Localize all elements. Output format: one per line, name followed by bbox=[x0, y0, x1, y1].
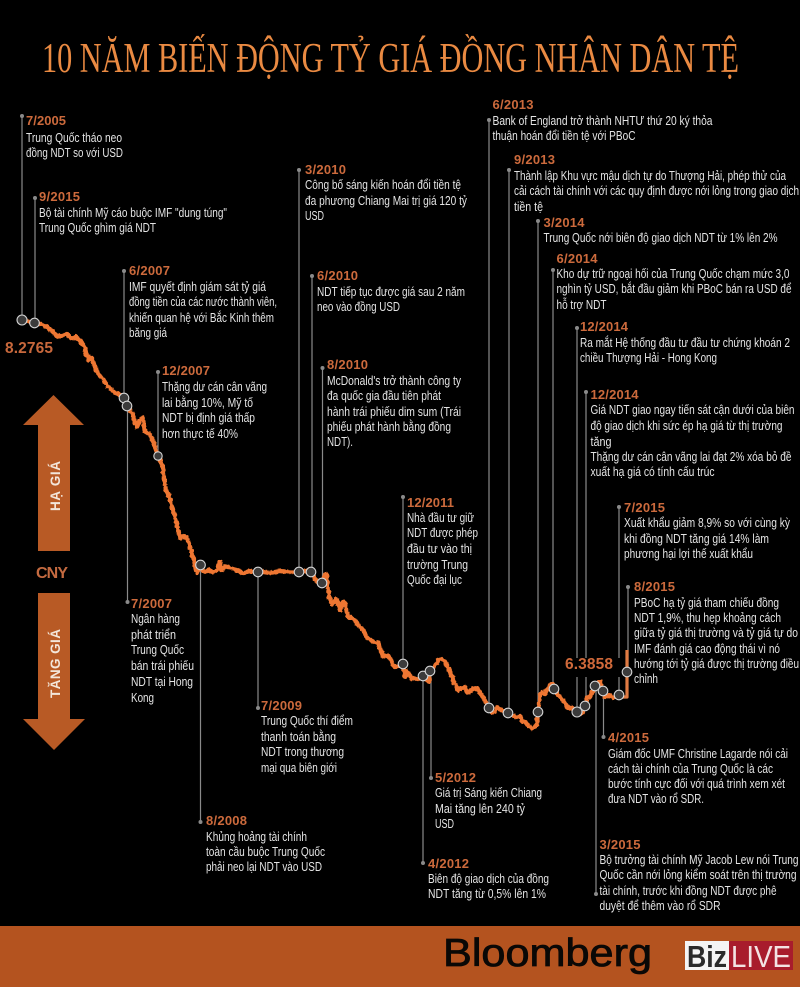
footer bar bbox=[0, 926, 800, 987]
annotation 7/2007: Ngân hàng bbox=[131, 612, 180, 626]
annotation 8/2015 bbox=[634, 579, 799, 686]
annotation 8/2010 bbox=[327, 357, 462, 449]
annotation 12/2011: Nhà đầu tư giữ bbox=[407, 511, 474, 525]
annotation 7/2015: phương hại lợi thế xuất khẩu bbox=[624, 547, 753, 561]
annotation 7/2015 bbox=[624, 500, 791, 561]
annotation 12/2011: trường Trung bbox=[407, 558, 468, 572]
annotation 7/2007: Trung Quốc bbox=[131, 643, 184, 657]
annotation 8/2008: Khủng hoảng tài chính bbox=[206, 830, 307, 844]
annotation 5/2012: Mai tăng lên 240 tỷ bbox=[435, 802, 526, 816]
annotation 8/2008: phải neo lại NDT vào USD bbox=[206, 860, 322, 874]
annotation 8/2010: hành trái phiếu dim sum (Trái bbox=[327, 405, 461, 419]
annotation 6/2007: đồng tiền của các nước thành viên, bbox=[129, 295, 277, 309]
annotation 8/2015: 8/2015 bbox=[634, 579, 675, 594]
annotation 4/2015: 4/2015 bbox=[608, 730, 649, 745]
annotation 7/2007: 7/2007 bbox=[131, 596, 172, 611]
annotation 8/2008: toàn cầu buộc Trung Quốc bbox=[206, 845, 325, 859]
annotation 6/2014: hỗ trợ NDT bbox=[556, 297, 607, 312]
annotation 12/2014 stock connect: chiều Thượng Hải - Hong Kong bbox=[580, 351, 717, 365]
annotation 12/2011: NDT được phép bbox=[407, 526, 478, 540]
annotation 5/2012: USD bbox=[435, 817, 454, 831]
annotation 7/2007: phát triển bbox=[131, 628, 176, 642]
annotation 9/2015: 9/2015 bbox=[39, 189, 80, 204]
annotation 6/2013 bbox=[492, 97, 713, 143]
arrow: depreciation (up): HẠ GIÁ bbox=[48, 461, 63, 511]
annotation 8/2010: đa quốc gia đầu tiên phát bbox=[327, 389, 441, 403]
annotation 3/2010: USD bbox=[305, 209, 324, 223]
annotation 4/2012: NDT tăng từ 0,5% lên 1% bbox=[428, 887, 546, 901]
annotation 12/2007: 12/2007 bbox=[162, 363, 210, 378]
arrow: appreciation (down): TĂNG GIÁ bbox=[48, 629, 63, 698]
BizLIVE logo: Biz bbox=[687, 939, 727, 974]
annotation 12/2011 bbox=[407, 495, 478, 587]
leader lines bbox=[20, 114, 630, 896]
arrow: appreciation (down) bbox=[23, 593, 85, 750]
annotation 7/2009: thanh toán bằng bbox=[261, 729, 336, 744]
annotation 7/2007: Kong bbox=[131, 691, 154, 705]
annotation 12/2014 stock connect: 12/2014 bbox=[580, 319, 629, 334]
annotation 7/2007: NDT tại Hong bbox=[131, 675, 193, 689]
annotation 8/2010: NDT). bbox=[327, 435, 353, 449]
annotation 7/2007: bán trái phiếu bbox=[131, 659, 194, 673]
annotation 12/2007: hơn thực tế 40% bbox=[162, 427, 238, 441]
annotation 8/2010: 8/2010 bbox=[327, 357, 368, 372]
annotation 7/2009: Trung Quốc thí điểm bbox=[261, 714, 353, 728]
annotation 7/2015: 7/2015 bbox=[624, 500, 665, 515]
annotation 12/2011: 12/2011 bbox=[407, 495, 454, 510]
annotation 6/2007: khiến quan hệ với Bắc Kinh thêm bbox=[129, 310, 274, 325]
currency label: CNY bbox=[36, 565, 68, 582]
annotation 12/2011: đầu tư vào thị bbox=[407, 542, 472, 556]
annotation 7/2005 bbox=[26, 113, 123, 160]
annotation 6/2010: 6/2010 bbox=[317, 268, 358, 283]
annotation 12/2014 spot rate: tăng bbox=[590, 435, 612, 449]
annotation 12/2014 spot rate: xuất hạ giá có tính cấu trúc bbox=[590, 465, 714, 479]
annotation 7/2009 bbox=[261, 698, 353, 775]
annotation 3/2015 bbox=[600, 837, 799, 913]
annotation 7/2015: khi đồng NDT tăng giá 14% làm bbox=[624, 532, 769, 546]
arrow: depreciation (up) bbox=[23, 395, 84, 551]
data point markers bbox=[17, 315, 632, 718]
annotation 9/2013 bbox=[514, 152, 799, 214]
annotation 4/2012: 4/2012 bbox=[428, 856, 469, 871]
annotation 6/2013: Bank of England trở thành NHTƯ thứ 20 ký thỏa bbox=[492, 114, 713, 128]
annotation 12/2007 bbox=[162, 363, 267, 441]
annotation 4/2015 bbox=[608, 730, 788, 806]
start value: 8.2765 bbox=[5, 340, 53, 357]
annotation 6/2007: băng giá bbox=[129, 326, 167, 340]
annotation 6/2010 bbox=[317, 268, 465, 314]
annotation 3/2014 bbox=[544, 215, 778, 245]
annotation 5/2012: Giá trị Sáng kiến Chiang bbox=[435, 786, 542, 800]
annotation 3/2015: duyệt để thêm vào rổ SDR bbox=[600, 899, 720, 913]
annotation 6/2007: 6/2007 bbox=[129, 263, 170, 278]
annotation 8/2010: phiếu phát hành bằng đồng bbox=[327, 419, 451, 434]
BizLIVE logo: LIVE bbox=[731, 939, 791, 974]
annotation 9/2015: Bộ tài chính Mỹ cáo buộc IMF "dung túng" bbox=[39, 206, 227, 220]
annotation 7/2009: mại qua biên giới bbox=[261, 761, 337, 775]
BizLIVE logo bbox=[685, 939, 793, 974]
annotation 8/2015: chỉnh bbox=[634, 672, 658, 686]
annotation 9/2013: tiền tệ bbox=[514, 200, 543, 214]
annotation 9/2015: Trung Quốc ghìm giá NDT bbox=[39, 221, 156, 235]
annotation 6/2014 bbox=[556, 251, 792, 312]
annotation 3/2010: đa phương Chiang Mai trị giá 120 tỷ bbox=[305, 194, 468, 208]
annotation 8/2008 bbox=[206, 813, 325, 874]
annotation 5/2012: 5/2012 bbox=[435, 770, 476, 785]
annotation 7/2005: đồng NDT so với USD bbox=[26, 146, 123, 160]
annotation 12/2014 spot rate bbox=[590, 387, 795, 479]
annotation 3/2010 bbox=[305, 162, 468, 223]
annotation 12/2011: Quốc đại lục bbox=[407, 573, 462, 587]
annotation 12/2014 spot rate: 12/2014 bbox=[590, 387, 639, 402]
annotation 12/2007: lai bằng 10%, Mỹ tố bbox=[162, 395, 253, 410]
annotation 6/2007: IMF quyết định giám sát tỷ giá bbox=[129, 280, 266, 294]
annotation 12/2007: Thặng dư cán cân vãng bbox=[162, 380, 267, 394]
annotation 8/2008: 8/2008 bbox=[206, 813, 247, 828]
annotation 4/2012 bbox=[428, 856, 549, 901]
annotation 12/2014 stock connect bbox=[580, 319, 790, 365]
annotation 7/2005: Trung Quốc tháo neo bbox=[26, 131, 122, 145]
annotation 7/2007 bbox=[131, 596, 194, 705]
annotation 5/2012 bbox=[435, 770, 542, 831]
end value: 6.3858 bbox=[565, 656, 613, 673]
annotation 4/2015: đưa NDT vào rổ SDR. bbox=[608, 792, 704, 806]
annotation 6/2010: neo vào đồng USD bbox=[317, 300, 400, 314]
annotation 6/2014: 6/2014 bbox=[556, 251, 598, 266]
line chart: CNY exchange rate bbox=[18, 320, 627, 729]
annotation 6/2007 bbox=[129, 263, 277, 340]
annotation 6/2013: thuận hoán đổi tiền tệ với PBoC bbox=[492, 129, 636, 143]
annotation 3/2014: 3/2014 bbox=[544, 215, 585, 230]
annotation 3/2015: 3/2015 bbox=[600, 837, 640, 852]
annotation 6/2010: NDT tiếp tục được giá sau 2 năm bbox=[317, 285, 465, 299]
annotation 4/2012: Biên độ giao dịch của đồng bbox=[428, 872, 549, 886]
annotation 7/2009: 7/2009 bbox=[261, 698, 302, 713]
annotation 7/2009: NDT trong thương bbox=[261, 745, 344, 759]
annotation 3/2010: Công bố sáng kiến hoán đổi tiền tệ bbox=[305, 178, 461, 192]
annotation 7/2005: 7/2005 bbox=[26, 113, 66, 128]
annotation 9/2013: 9/2013 bbox=[514, 152, 555, 167]
annotation 9/2015 bbox=[39, 189, 227, 235]
annotation 12/2007: NDT bị định giá thấp bbox=[162, 411, 255, 425]
annotation 8/2010: McDonald's trở thành công ty bbox=[327, 374, 462, 388]
annotation 3/2010: 3/2010 bbox=[305, 162, 346, 177]
Bloomberg logo: Bloomberg bbox=[443, 932, 652, 975]
annotation 6/2013: 6/2013 bbox=[492, 97, 534, 112]
